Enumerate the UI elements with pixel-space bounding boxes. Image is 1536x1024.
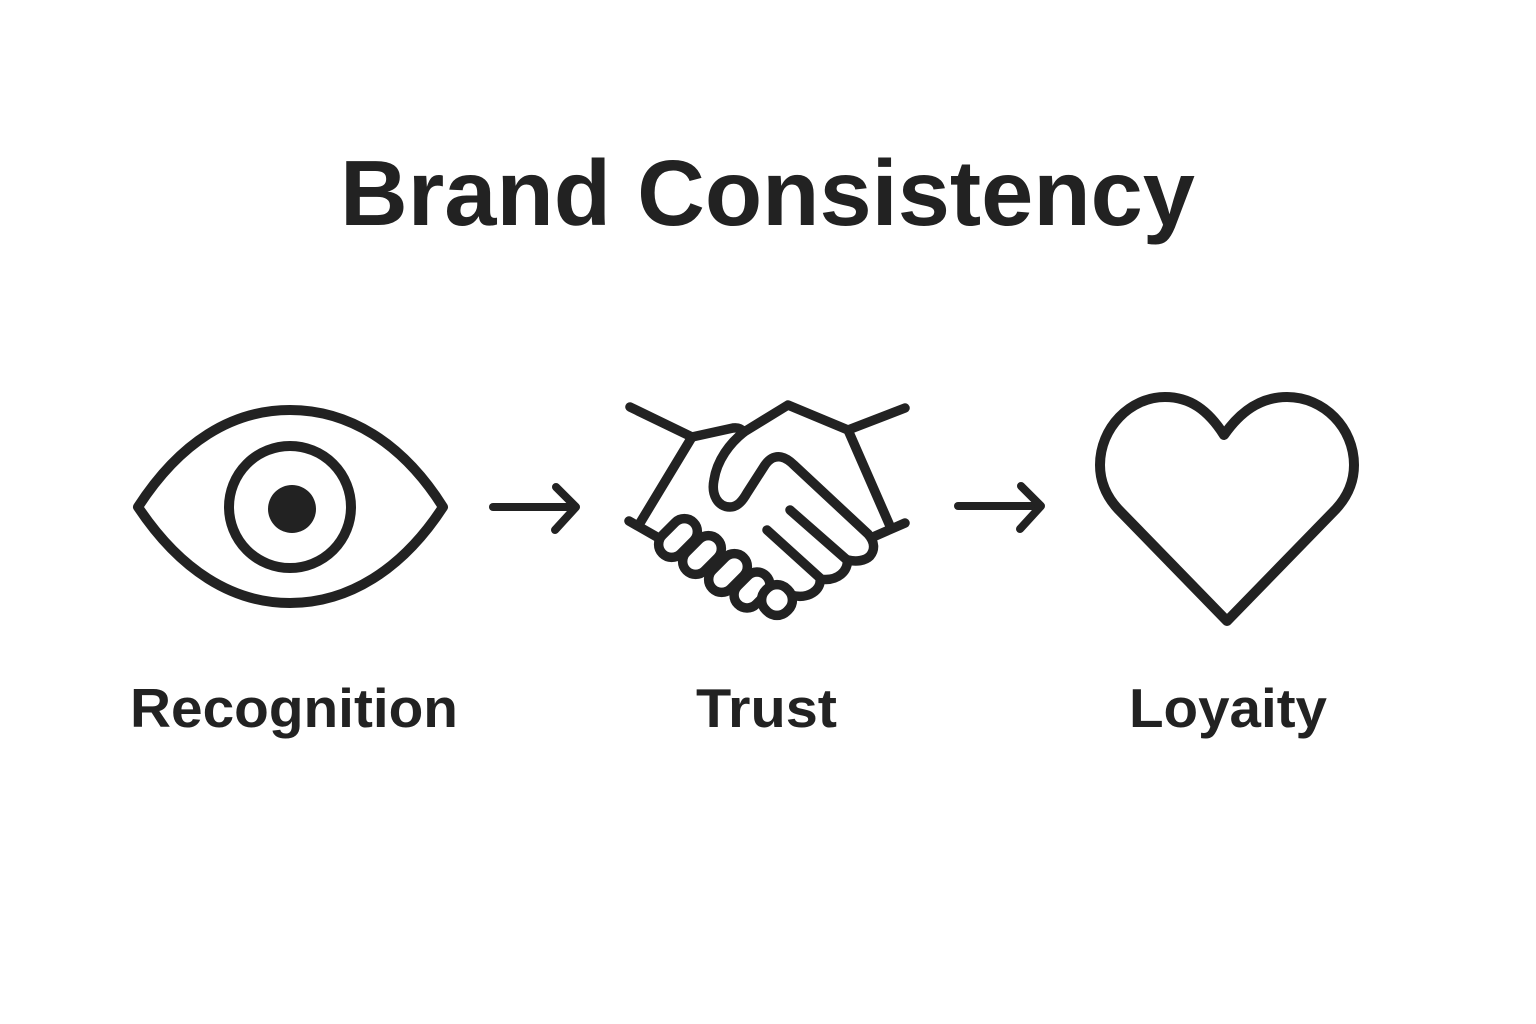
arrow: trust to loyalty [958,486,1041,529]
label: trust: Trust [696,677,837,739]
label: loyalty: Loyaity [1129,677,1327,739]
title: Brand Consistency [340,141,1195,245]
label: recognition: Recognition [130,677,458,739]
icon: eye [138,410,443,603]
icon: handshake [629,405,905,621]
icon: heart [1100,397,1354,621]
arrow: recognition to trust [493,487,576,530]
hand fingers [653,513,798,621]
